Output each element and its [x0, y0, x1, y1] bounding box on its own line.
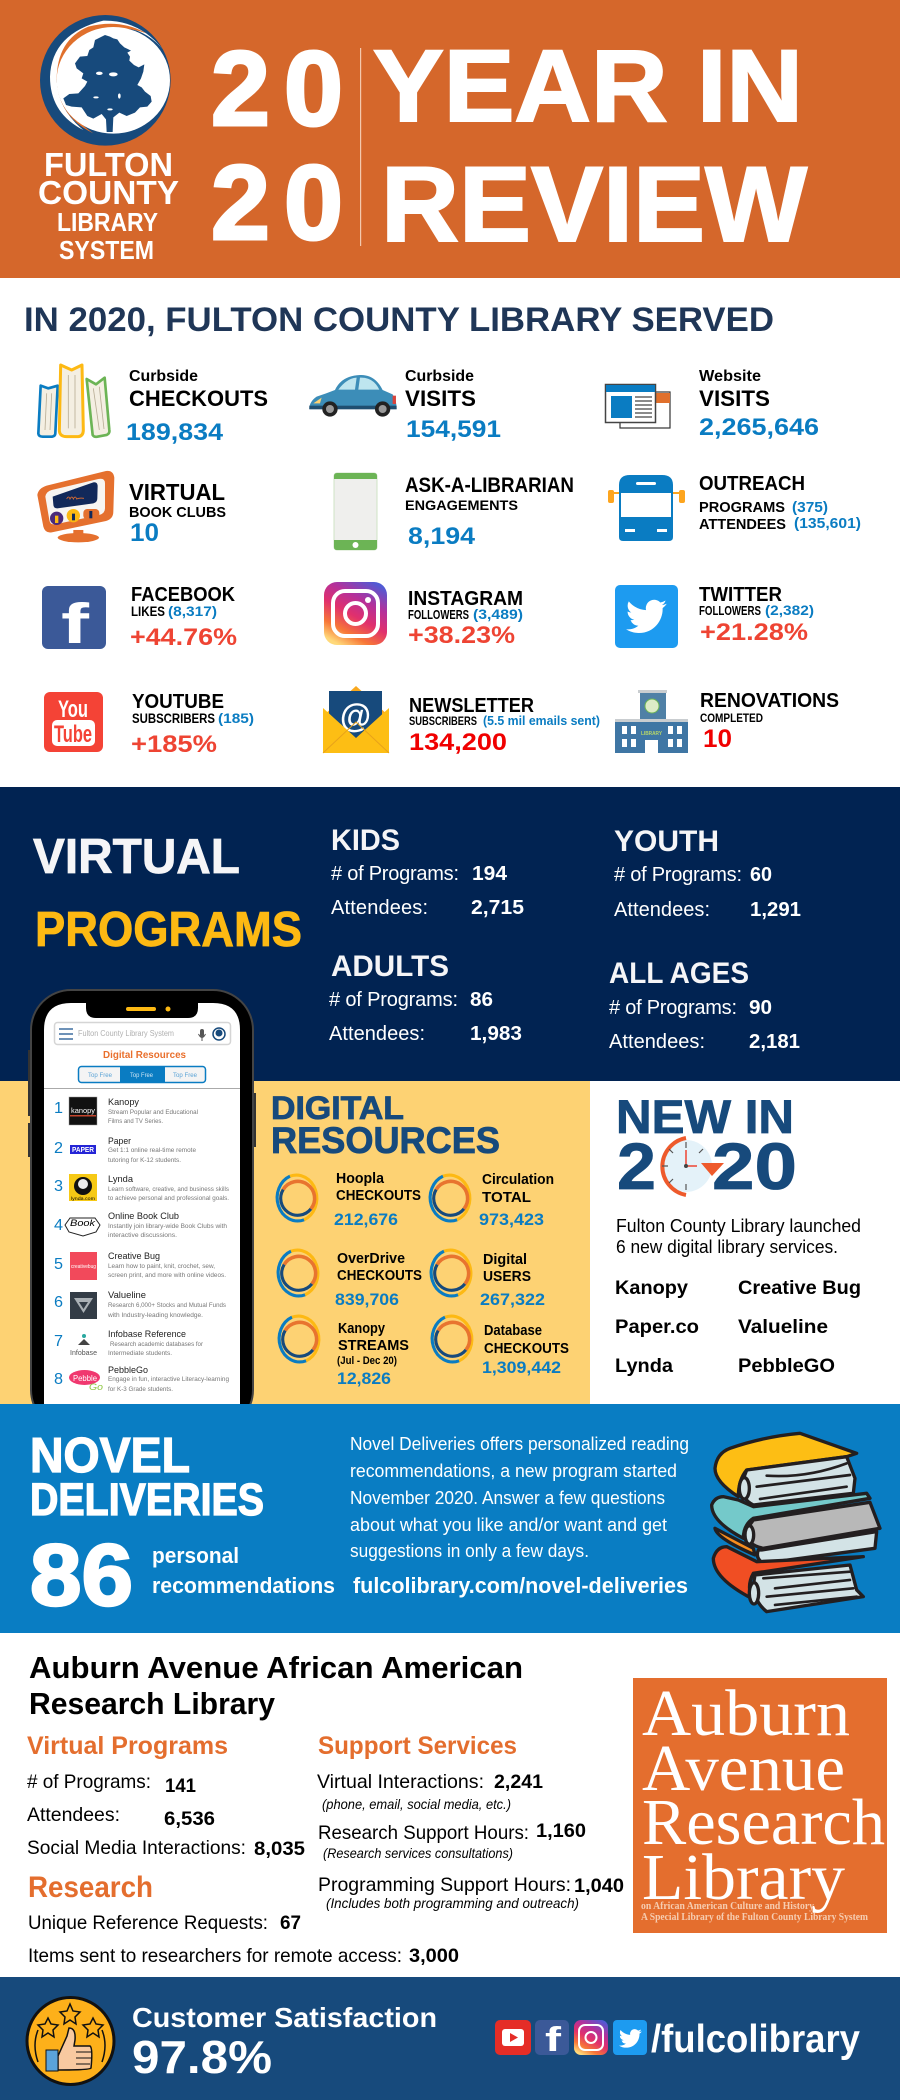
- section: support services: 1,160: [536, 1820, 586, 1842]
- stat: database checkouts: CHECKOUTS: [484, 1341, 569, 1357]
- stats: adults: # of Programs:: [329, 989, 458, 1011]
- stat: hoopla: CHECKOUTS: [336, 1188, 421, 1204]
- heading: virtual programs: PROGRAMS: [35, 903, 302, 957]
- stat: website visits: [606, 368, 819, 441]
- title: year in review: [373, 29, 807, 264]
- panel: virtual programs: [0, 787, 900, 1081]
- item 2 paper: tutoring for K-12 students.: [108, 1157, 181, 1164]
- item 4 online book club: Online Book Club: [108, 1211, 179, 1222]
- item 7 infobase: Infobase Reference: [108, 1329, 186, 1340]
- heading: digital resources tab: Digital Resources: [103, 1049, 186, 1061]
- stat: facebook: [42, 584, 237, 656]
- stats: all ages: # of Programs:: [609, 997, 737, 1019]
- text: outreach: ATTENDEES: [699, 516, 786, 533]
- stat: digital users: [431, 1250, 545, 1309]
- section: support services: (Includes both programming and outreach): [326, 1895, 579, 1911]
- stats: kids: # of Programs:: [331, 863, 459, 885]
- heading: in 2020 served: IN 2020, FULTON COUNTY LIBRARY SERVED: [24, 301, 774, 339]
- item 3 lynda: [54, 1174, 230, 1202]
- heading: auburn avenue: Research Library: [29, 1686, 276, 1721]
- stat: 86 personal recommendations: personal: [152, 1543, 239, 1568]
- item 8 pebblego: [54, 1366, 229, 1391]
- item 6 valueline: with Industry-leading knowledge.: [107, 1312, 203, 1319]
- text: novel deliveries description: Novel Deliveries offers personalized reading: [350, 1433, 689, 1454]
- text: curbside checkouts: Curbside: [129, 368, 198, 385]
- item 4 online book club: [54, 1212, 227, 1237]
- stat: overdrive: CHECKOUTS: [337, 1268, 422, 1284]
- icon: web pages: [606, 384, 670, 428]
- stat: youtube: [44, 691, 254, 758]
- stat: renovations: [615, 690, 839, 753]
- icon: mobile phone: [334, 473, 377, 550]
- item 7 infobase: 7: [54, 1333, 63, 1350]
- tabs: Top Free: [88, 1072, 112, 1079]
- item 8 pebblego: Pebble: [73, 1374, 98, 1383]
- stat: ask-a-librarian: [334, 473, 574, 550]
- item 6 valueline: [54, 1290, 227, 1319]
- item 5 creative bug: creativebug: [71, 1264, 96, 1270]
- stat: overdrive: OverDrive: [337, 1251, 405, 1267]
- heading: new in 2020: 2: [617, 1129, 656, 1203]
- stat: curbside checkouts: [38, 365, 268, 446]
- text: outreach: (375): [792, 499, 828, 516]
- section: virtual programs: [27, 1732, 305, 1860]
- icon: envelope: @: [340, 697, 371, 734]
- heading: digital resources: RESOURCES: [271, 1120, 500, 1161]
- text: virtual book clubs: VIRTUAL: [129, 479, 225, 505]
- item 4 online book club: interactive discussions.: [108, 1232, 177, 1239]
- heading: digital resources: [271, 1090, 500, 1161]
- panel: header banner: [0, 0, 900, 278]
- item 1 kanopy: Films and TV Series.: [108, 1118, 163, 1125]
- item 2 paper: Paper: [108, 1136, 131, 1147]
- logo block: auburn avenue research library: Library: [642, 1841, 845, 1914]
- item 5 creative bug: Creative Bug: [108, 1251, 160, 1262]
- list: new services: [615, 1278, 861, 1377]
- panel: auburn avenue research library: [27, 1650, 887, 1967]
- heading: new in 2020: [616, 1090, 797, 1203]
- item 3 lynda: Learn software, creative, and business skills: [108, 1186, 230, 1193]
- text: novel deliveries description: suggestions in only a few days.: [350, 1540, 589, 1561]
- stats: all ages: 2,181: [749, 1031, 800, 1053]
- text: fulcolibrary handle: /fulcolibrary: [651, 2018, 860, 2061]
- stats: kids: Attendees:: [331, 897, 428, 919]
- text: ask-a-librarian: 8,194: [408, 523, 476, 550]
- item 8 pebblego: PebbleGo: [108, 1365, 148, 1376]
- text: virtual book clubs: 10: [130, 519, 159, 547]
- text: twitter: [699, 584, 814, 646]
- text: launch description: [616, 1215, 861, 1257]
- text: newsletter: 134,200: [409, 729, 507, 756]
- icon: car: [309, 375, 397, 417]
- text: novel deliveries description: about what you like and/or want and get: [350, 1514, 667, 1535]
- stats: adults: 1,983: [470, 1023, 522, 1045]
- icon: youtube: You: [58, 696, 88, 723]
- stat: database checkouts: Database: [484, 1323, 542, 1339]
- stat: kanopy streams: (Jul - Dec 20): [337, 1355, 397, 1367]
- stat: kanopy streams: STREAMS: [338, 1338, 409, 1354]
- text: curbside visits: Curbside: [405, 368, 474, 385]
- title: 2020 stacked digits: [211, 30, 361, 262]
- item 4 online book club: 4: [54, 1217, 63, 1234]
- section: research: Research: [28, 1871, 153, 1904]
- text: curbside checkouts: [126, 368, 268, 446]
- icon: orange monitor: [37, 471, 114, 542]
- text: outreach: [699, 472, 861, 533]
- stat: 86 personal recommendations: recommendations: [152, 1573, 335, 1598]
- stats: kids: 2,715: [471, 897, 524, 919]
- icon: library building: [615, 690, 688, 753]
- text: twitter: (2,382): [765, 603, 814, 618]
- stat: overdrive: [278, 1250, 422, 1309]
- stat: circulation: TOTAL: [482, 1190, 531, 1206]
- list: new services: Valueline: [738, 1317, 828, 1338]
- stat: digital users: Digital: [483, 1252, 527, 1268]
- text: youtube: (185): [218, 711, 254, 726]
- stats: kids: KIDS: [331, 824, 400, 857]
- text: facebook: LIKES: [131, 604, 165, 619]
- item 3 lynda: lynda.com: [71, 1196, 95, 1201]
- text: ask-a-librarian: ENGAGEMENTS: [405, 497, 518, 513]
- stat: digital users: 267,322: [480, 1290, 545, 1309]
- text: curbside checkouts: 189,834: [126, 419, 224, 446]
- item 5 creative bug: screen print, and more with online videos.: [108, 1272, 226, 1279]
- section: virtual programs: 6,536: [164, 1808, 215, 1830]
- section: virtual programs: 141: [165, 1775, 196, 1797]
- icon: facebook: f: [61, 592, 90, 656]
- heading: novel deliveries: DELIVERIES: [30, 1474, 264, 1525]
- stats: youth: 60: [750, 864, 772, 886]
- stat: kanopy streams: [279, 1316, 409, 1388]
- stats: adults: 86: [470, 989, 493, 1011]
- item 2 paper: PAPER: [72, 1147, 94, 1154]
- text: logo wordmark: COUNTY: [38, 174, 179, 211]
- text: virtual book clubs: [129, 479, 226, 547]
- text: ask-a-librarian: [405, 474, 574, 550]
- text: twitter: +21.28%: [700, 619, 808, 646]
- item 7 infobase: Research academic databases for: [110, 1341, 204, 1348]
- logo block: auburn avenue research library: Research: [642, 1786, 885, 1859]
- section: research: Items sent to researchers for remote access:: [28, 1945, 402, 1967]
- heading: auburn avenue: [29, 1650, 523, 1721]
- section: virtual programs: 8,035: [254, 1838, 305, 1860]
- icon: books: [38, 365, 109, 437]
- heading: virtual programs: [33, 830, 302, 957]
- section: virtual programs: Virtual Programs: [27, 1732, 228, 1760]
- text: logo wordmark: [38, 146, 179, 265]
- stats: all ages: [609, 957, 800, 1053]
- logo block: auburn avenue research library: on African American Culture and History: [641, 1901, 815, 1912]
- title: year in review: REVIEW: [381, 144, 807, 264]
- section: support services: [317, 1732, 624, 1911]
- stat: database checkouts: 1,309,442: [482, 1358, 561, 1377]
- item 7 infobase: Intermediate students.: [108, 1350, 172, 1357]
- icon: clock: [660, 1138, 724, 1195]
- item 1 kanopy: Stream Popular and Educational: [108, 1109, 199, 1116]
- item 1 kanopy: kanopy: [71, 1106, 95, 1115]
- stat: newsletter: [323, 686, 600, 756]
- stats: youth: 1,291: [750, 899, 801, 921]
- text: website visits: Website: [699, 368, 761, 385]
- section: support services: Research Support Hours:: [318, 1822, 529, 1844]
- panel: novel deliveries: [0, 1404, 900, 1633]
- item 5 creative bug: Learn how to paint, knit, crochet, sew,: [108, 1263, 215, 1270]
- text: curbside visits: 154,591: [406, 416, 501, 443]
- item 8 pebblego: for K-3 Grade students.: [108, 1386, 173, 1393]
- stat: curbside visits: [309, 368, 501, 443]
- icon: twitter: [615, 585, 678, 648]
- list: new services: PebbleGO: [738, 1356, 835, 1377]
- text: instagram: (3,489): [473, 607, 523, 622]
- stat: 86 personal recommendations: [30, 1527, 335, 1624]
- heading: auburn avenue: Auburn Avenue African American: [29, 1650, 523, 1685]
- stats: adults: [329, 950, 522, 1045]
- panel: footer: [0, 1977, 900, 2100]
- text: novel deliveries description: November 2020. Answer a few questions: [350, 1487, 665, 1508]
- text: novel deliveries description: [350, 1433, 689, 1561]
- section: support services: Programming Support Hours:: [318, 1874, 571, 1896]
- section: support services: Support Services: [318, 1732, 517, 1760]
- text: website visits: VISITS: [699, 386, 770, 411]
- title: 2020 stacked digits: 20: [211, 30, 343, 148]
- section: research: [28, 1871, 459, 1967]
- text: facebook: FACEBOOK: [131, 584, 236, 606]
- text: launch description: Fulton County Library launched: [616, 1215, 861, 1236]
- text: newsletter: [409, 695, 600, 756]
- text: youtube: +185%: [131, 731, 217, 758]
- icon: instagram: [324, 582, 387, 645]
- section: support services: 2,241: [494, 1771, 543, 1793]
- item 3 lynda: to achieve personal and professional goals.: [108, 1195, 229, 1202]
- logo block: auburn avenue research library: A Special Library of the Fulton County Library System: [641, 1912, 868, 1923]
- stat: customer satisfaction: 97.8%: [132, 2031, 272, 2083]
- text: curbside checkouts: CHECKOUTS: [129, 386, 268, 411]
- icon: youtube: [44, 692, 103, 752]
- tabs: Top Free: [173, 1072, 197, 1079]
- stat: customer satisfaction: Customer Satisfaction: [132, 2002, 437, 2033]
- stat: database checkouts: [432, 1316, 569, 1377]
- text: outreach: OUTREACH: [699, 472, 805, 495]
- heading: novel deliveries: [30, 1429, 264, 1525]
- stat: kanopy streams: Kanopy: [338, 1321, 385, 1337]
- text: newsletter: NEWSLETTER: [409, 695, 534, 717]
- list: new services: Paper.co: [615, 1317, 699, 1338]
- social icons: f: [545, 2021, 562, 2059]
- stats: youth: YOUTH: [614, 825, 719, 858]
- icon: envelope: [323, 686, 389, 753]
- title: 2020 stacked digits: 20: [211, 144, 343, 262]
- item 8 pebblego: Engage in fun, interactive Literacy-learning: [108, 1376, 229, 1383]
- logo block: auburn avenue research library: Avenue: [642, 1732, 845, 1805]
- text: renovations: COMPLETED: [700, 711, 763, 725]
- stats: youth: Attendees:: [614, 899, 710, 921]
- item 7 infobase: Infobase: [70, 1348, 97, 1357]
- text: facebook: [130, 584, 237, 651]
- text: newsletter: (5.5 mil emails sent): [483, 713, 600, 728]
- stat: circulation: Circulation: [482, 1172, 554, 1188]
- stat: instagram: [324, 582, 523, 649]
- section: research: Unique Reference Requests:: [28, 1912, 268, 1934]
- icon: library building: LIBRARY: [641, 731, 662, 737]
- stat: kanopy streams: 12,826: [337, 1369, 391, 1388]
- tabs: Top Free: [130, 1072, 153, 1079]
- section: virtual programs: Social Media Interactions:: [27, 1837, 246, 1859]
- section: support services: (Research services consultations): [323, 1845, 513, 1861]
- stat: outreach: [608, 472, 861, 541]
- text: youtube: [131, 691, 254, 758]
- stat: circulation: [430, 1172, 554, 1229]
- item 2 paper: Get 1:1 online real-time remote: [108, 1147, 196, 1154]
- stats: adults: Attendees:: [329, 1023, 425, 1045]
- icon: facebook: [42, 586, 106, 656]
- text: instagram: +38.23%: [408, 622, 515, 649]
- stats: youth: [614, 825, 801, 921]
- item 5 creative bug: 5: [54, 1256, 63, 1273]
- icon: stack of books: [712, 1433, 880, 1612]
- search bar: Fulton County Library System: [78, 1029, 174, 1038]
- item 2 paper: 2: [54, 1140, 63, 1157]
- stat: 86 personal recommendations: 86: [30, 1527, 133, 1624]
- item 1 kanopy: 1: [54, 1100, 63, 1117]
- heading: new in 2020: NEW IN: [616, 1090, 794, 1143]
- text: ask-a-librarian: ASK-A-LIBRARIAN: [405, 474, 574, 497]
- item 3 lynda: 3: [54, 1178, 63, 1195]
- icon: bus: [608, 475, 685, 541]
- section: virtual programs: Attendees:: [27, 1804, 120, 1826]
- text: url: fulcolibrary.com/novel-deliveries: [353, 1573, 688, 1598]
- icon: library logo tree: [40, 15, 171, 146]
- text: renovations: 10: [703, 725, 732, 753]
- section: research: 67: [280, 1912, 301, 1934]
- item 8 pebblego: 8: [54, 1371, 63, 1388]
- text: launch description: 6 new digital library services.: [616, 1236, 838, 1257]
- item 2 paper: [54, 1136, 196, 1164]
- text: outreach: (135,601): [794, 515, 861, 532]
- list: new services: Lynda: [615, 1356, 673, 1377]
- item 3 lynda: Lynda: [108, 1174, 134, 1185]
- section: support services: (phone, email, social media, etc.): [322, 1796, 511, 1812]
- stat: virtual book clubs: [37, 471, 226, 547]
- stat: customer satisfaction: [132, 2002, 437, 2083]
- heading: virtual programs: VIRTUAL: [33, 830, 240, 884]
- section: support services: Virtual Interactions:: [317, 1771, 484, 1793]
- text: website visits: [699, 368, 819, 441]
- text: curbside visits: [405, 368, 501, 443]
- text: facebook: (8,317): [168, 604, 217, 619]
- item 4 online book club: Instantly join library-wide Book Clubs with: [108, 1223, 227, 1230]
- item 5 creative bug: [54, 1251, 226, 1280]
- text: instagram: [408, 588, 523, 649]
- stats: all ages: Attendees:: [609, 1031, 705, 1053]
- heading: novel deliveries: NOVEL: [30, 1429, 190, 1483]
- stats: kids: [331, 824, 524, 919]
- panel: digital resources: [0, 1081, 590, 1404]
- text: youtube: YOUTUBE: [132, 691, 224, 713]
- stats: all ages: ALL AGES: [609, 957, 749, 990]
- text: youtube: SUBSCRIBERS: [132, 711, 215, 726]
- heading: digital resources: DIGITAL: [271, 1090, 404, 1126]
- text: website visits: 2,265,646: [699, 414, 819, 441]
- section: virtual programs: # of Programs:: [27, 1771, 151, 1793]
- item 1 kanopy: Kanopy: [108, 1097, 139, 1108]
- text: renovations: [700, 690, 839, 753]
- search bar: [54, 1022, 230, 1044]
- phone mockup: [28, 990, 256, 1440]
- heading: new in 2020: 20: [712, 1129, 797, 1203]
- stats: adults: ADULTS: [331, 950, 449, 983]
- item 6 valueline: 6: [54, 1294, 63, 1311]
- tabs: [78, 1066, 206, 1083]
- item 6 valueline: Valueline: [108, 1290, 146, 1301]
- title: year in review: YEAR IN: [373, 29, 803, 143]
- stat: circulation: 973,423: [479, 1210, 544, 1229]
- text: logo wordmark: LIBRARY: [57, 207, 158, 237]
- text: instagram: FOLLOWERS: [408, 608, 469, 622]
- list: new services: Kanopy: [615, 1278, 688, 1299]
- text: renovations: RENOVATIONS: [700, 690, 839, 712]
- item 7 infobase: [54, 1330, 203, 1355]
- item 1 kanopy: [54, 1097, 199, 1125]
- logo block: auburn avenue research library: [633, 1677, 887, 1933]
- stat: digital users: USERS: [483, 1269, 531, 1285]
- stat: twitter: [615, 584, 814, 648]
- section: support services: 1,040: [574, 1875, 624, 1897]
- item 4 online book club: Book: [70, 1218, 96, 1228]
- stats: youth: # of Programs:: [614, 864, 742, 886]
- icon: youtube: Tube: [54, 721, 92, 748]
- text: instagram: INSTAGRAM: [408, 588, 523, 610]
- text: newsletter: SUBSCRIBERS: [409, 714, 477, 728]
- text: virtual book clubs: BOOK CLUBS: [129, 504, 226, 521]
- text: curbside visits: VISITS: [405, 386, 476, 411]
- text: twitter: FOLLOWERS: [699, 604, 761, 618]
- stat: hoopla: Hoopla: [336, 1171, 385, 1187]
- item 6 valueline: Research 6,000+ Stocks and Mutual Funds: [108, 1302, 227, 1309]
- text: twitter: TWITTER: [699, 584, 783, 606]
- stat: hoopla: 212,676: [334, 1210, 398, 1229]
- stat: overdrive: 839,706: [335, 1290, 399, 1309]
- item 8 pebblego: Go: [89, 1382, 103, 1392]
- text: logo wordmark: FULTON: [44, 146, 173, 183]
- panel: new in 2020: [615, 1090, 861, 1377]
- text: novel deliveries description: recommendations, a new program started: [350, 1460, 677, 1481]
- icon: thumbs up with stars: [27, 1998, 114, 2084]
- text: outreach: PROGRAMS: [699, 499, 785, 516]
- stats: kids: 194: [472, 863, 508, 885]
- logo block: auburn avenue research library: Auburn: [642, 1677, 850, 1750]
- text: logo wordmark: SYSTEM: [59, 235, 154, 265]
- list: new services: Creative Bug: [738, 1278, 861, 1299]
- stats: all ages: 90: [749, 997, 772, 1019]
- text: facebook: +44.76%: [130, 624, 237, 651]
- section: research: 3,000: [409, 1945, 459, 1967]
- social icons: [495, 2020, 647, 2059]
- stat: hoopla: [277, 1171, 421, 1229]
